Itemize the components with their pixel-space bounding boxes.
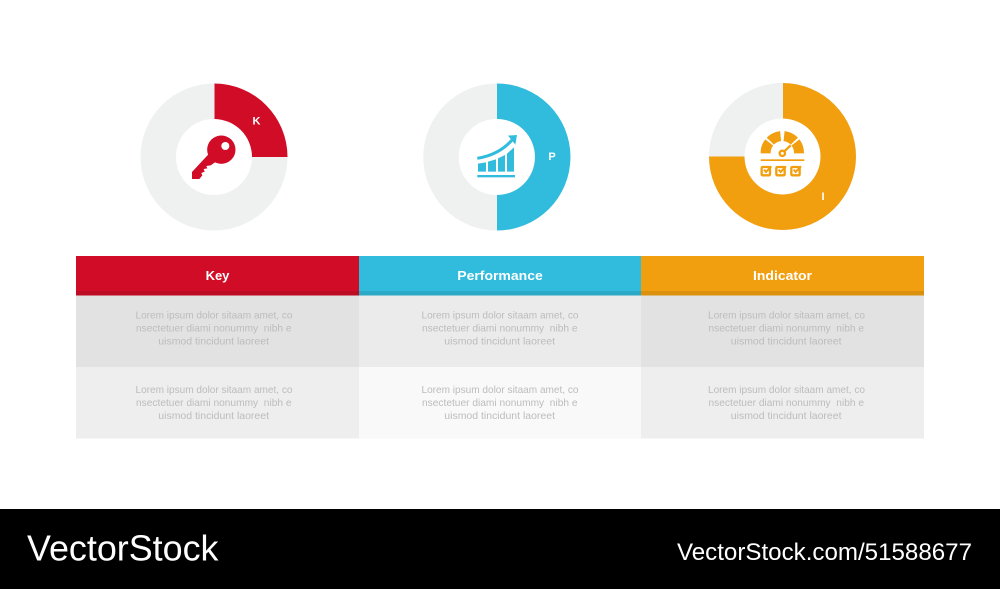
header: Indicator bbox=[641, 256, 924, 296]
cell: Indicator row 1: nsectetuer diami nonummy nibh e bbox=[708, 322, 864, 334]
cell: Key row 2: nsectetuer diami nonummy nibh e bbox=[136, 397, 292, 409]
header: Key: Key bbox=[206, 268, 230, 283]
footer logo text: VectorStock bbox=[27, 528, 219, 568]
cell: Performance row 2: Lorem ipsum dolor sitaam amet, co bbox=[422, 384, 579, 396]
cell: Indicator row 1: uismod tincidunt laoreet bbox=[731, 336, 842, 348]
header: Performance: Performance bbox=[457, 268, 543, 283]
cell: Performance row 2 bbox=[359, 367, 641, 438]
cell: Key row 2 bbox=[76, 367, 359, 438]
table column: Performance bbox=[359, 256, 641, 438]
table column: Indicator bbox=[641, 256, 924, 438]
cell: Key row 1: uismod tincidunt laoreet bbox=[158, 336, 269, 348]
cell: Key row 1: nsectetuer diami nonummy nibh e bbox=[136, 322, 292, 334]
cell: Key row 1 bbox=[76, 296, 359, 367]
label: P: P bbox=[548, 151, 556, 163]
cell: Performance row 1 bbox=[359, 296, 641, 367]
cell: Indicator row 2: Lorem ipsum dolor sitaam amet, co bbox=[708, 384, 865, 396]
header: Key bbox=[76, 256, 359, 296]
cell: Performance row 1: Lorem ipsum dolor sitaam amet, co bbox=[422, 310, 579, 322]
cell: Indicator row 2 bbox=[641, 367, 924, 438]
icon: key bbox=[192, 135, 235, 179]
cell: Key row 1: Lorem ipsum dolor sitaam amet, co bbox=[136, 310, 293, 322]
label: K: K bbox=[253, 116, 261, 128]
cell: Key row 2: uismod tincidunt laoreet bbox=[158, 410, 269, 422]
donut chart: Performance 50% bbox=[441, 84, 570, 230]
footer image id: VectorStock.com/51588677 bbox=[677, 539, 972, 566]
cell: Performance row 1: uismod tincidunt laoreet bbox=[444, 336, 555, 348]
header: Performance bbox=[359, 256, 641, 296]
segment: P bbox=[497, 84, 570, 230]
header: Indicator: Indicator bbox=[753, 268, 812, 283]
donut chart: Key 25% bbox=[158, 84, 288, 213]
footer bar bbox=[0, 509, 1000, 589]
icon: gauge with checkboxes bbox=[761, 136, 804, 175]
segment: K bbox=[214, 84, 288, 157]
cell: Indicator row 1 bbox=[641, 296, 924, 367]
cell: Indicator row 2: uismod tincidunt laoreet bbox=[731, 410, 842, 422]
segment: I bbox=[709, 83, 856, 230]
cell: Performance row 1: nsectetuer diami nonummy nibh e bbox=[422, 322, 578, 334]
donut chart: Indicator 75% bbox=[709, 83, 856, 230]
icon: growth chart bbox=[477, 135, 517, 177]
cell: Key row 2: Lorem ipsum dolor sitaam amet, co bbox=[136, 384, 293, 396]
table column: Key bbox=[76, 256, 359, 438]
cell: Indicator row 2: nsectetuer diami nonummy nibh e bbox=[708, 397, 864, 409]
cell: Indicator row 1: Lorem ipsum dolor sitaam amet, co bbox=[708, 310, 865, 322]
cell: Performance row 2: uismod tincidunt laoreet bbox=[444, 410, 555, 422]
label: I: I bbox=[821, 191, 825, 203]
cell: Performance row 2: nsectetuer diami nonummy nibh e bbox=[422, 397, 578, 409]
